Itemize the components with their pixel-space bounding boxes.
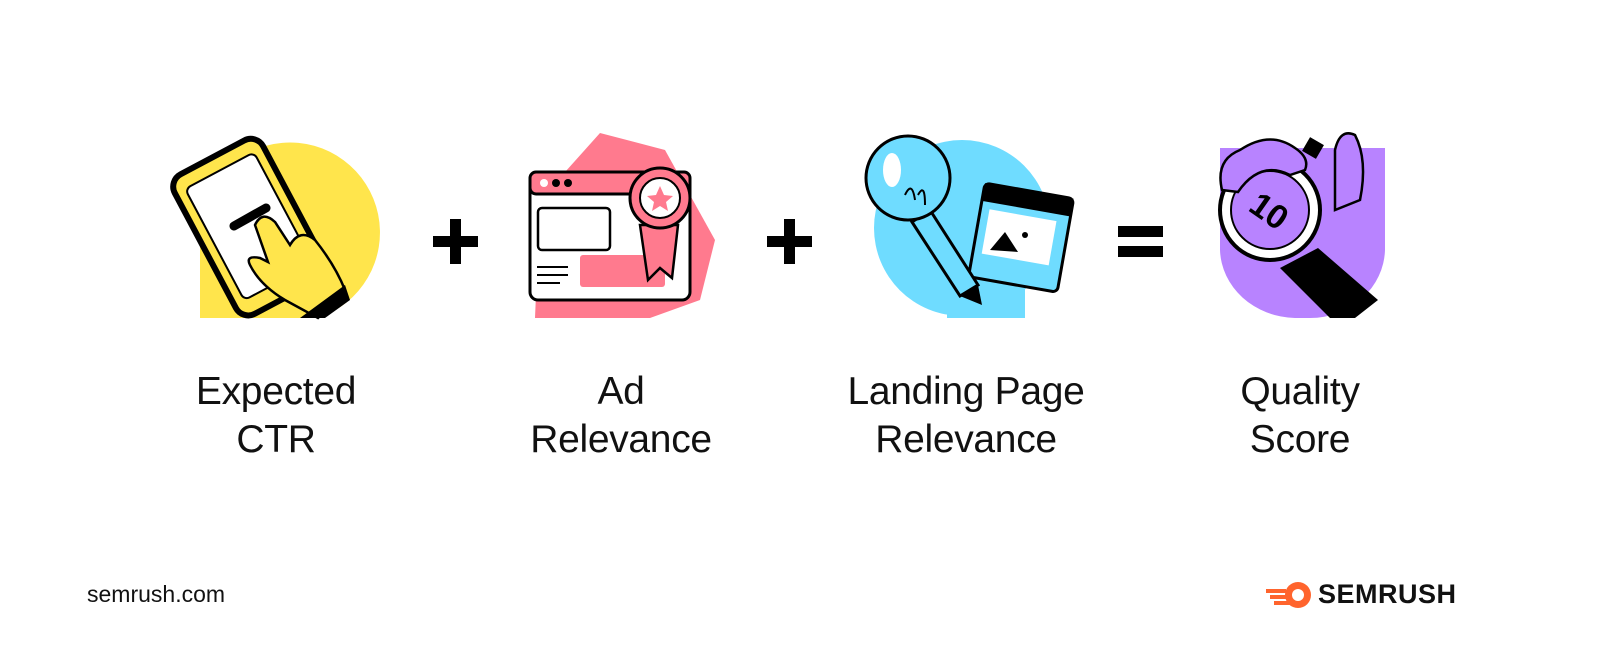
icon: quality score stopwatch — [1220, 133, 1385, 318]
logo: SEMRUSH: SEMRUSH — [1318, 578, 1457, 608]
icon: expected CTR phone tap — [168, 134, 380, 320]
label: Landing Page Relevance: Landing Page — [847, 370, 1085, 413]
label: Quality Score: Score — [1250, 418, 1350, 461]
plus sign 2 — [767, 219, 812, 264]
icon: ad relevance browser with ribbon — [530, 133, 715, 318]
label: Expected CTR: CTR — [236, 418, 316, 461]
label: Expected CTR — [196, 370, 356, 461]
footer: semrush.com: semrush.com — [87, 581, 225, 607]
plus sign 1 — [433, 219, 478, 264]
label: Ad Relevance: Relevance — [530, 418, 712, 461]
label: Landing Page Relevance: Relevance — [875, 418, 1057, 461]
label: Ad Relevance: Ad — [597, 370, 645, 413]
icon: quality score stopwatch: 10 — [1242, 185, 1295, 238]
equals sign — [1118, 226, 1163, 257]
label: Expected CTR: Expected — [196, 370, 356, 413]
label: Quality Score — [1240, 370, 1360, 461]
icon: landing page lightbulb — [866, 136, 1074, 318]
label: Ad Relevance — [530, 370, 712, 461]
label: Landing Page Relevance — [847, 370, 1085, 461]
label: Quality Score: Quality — [1240, 370, 1360, 413]
